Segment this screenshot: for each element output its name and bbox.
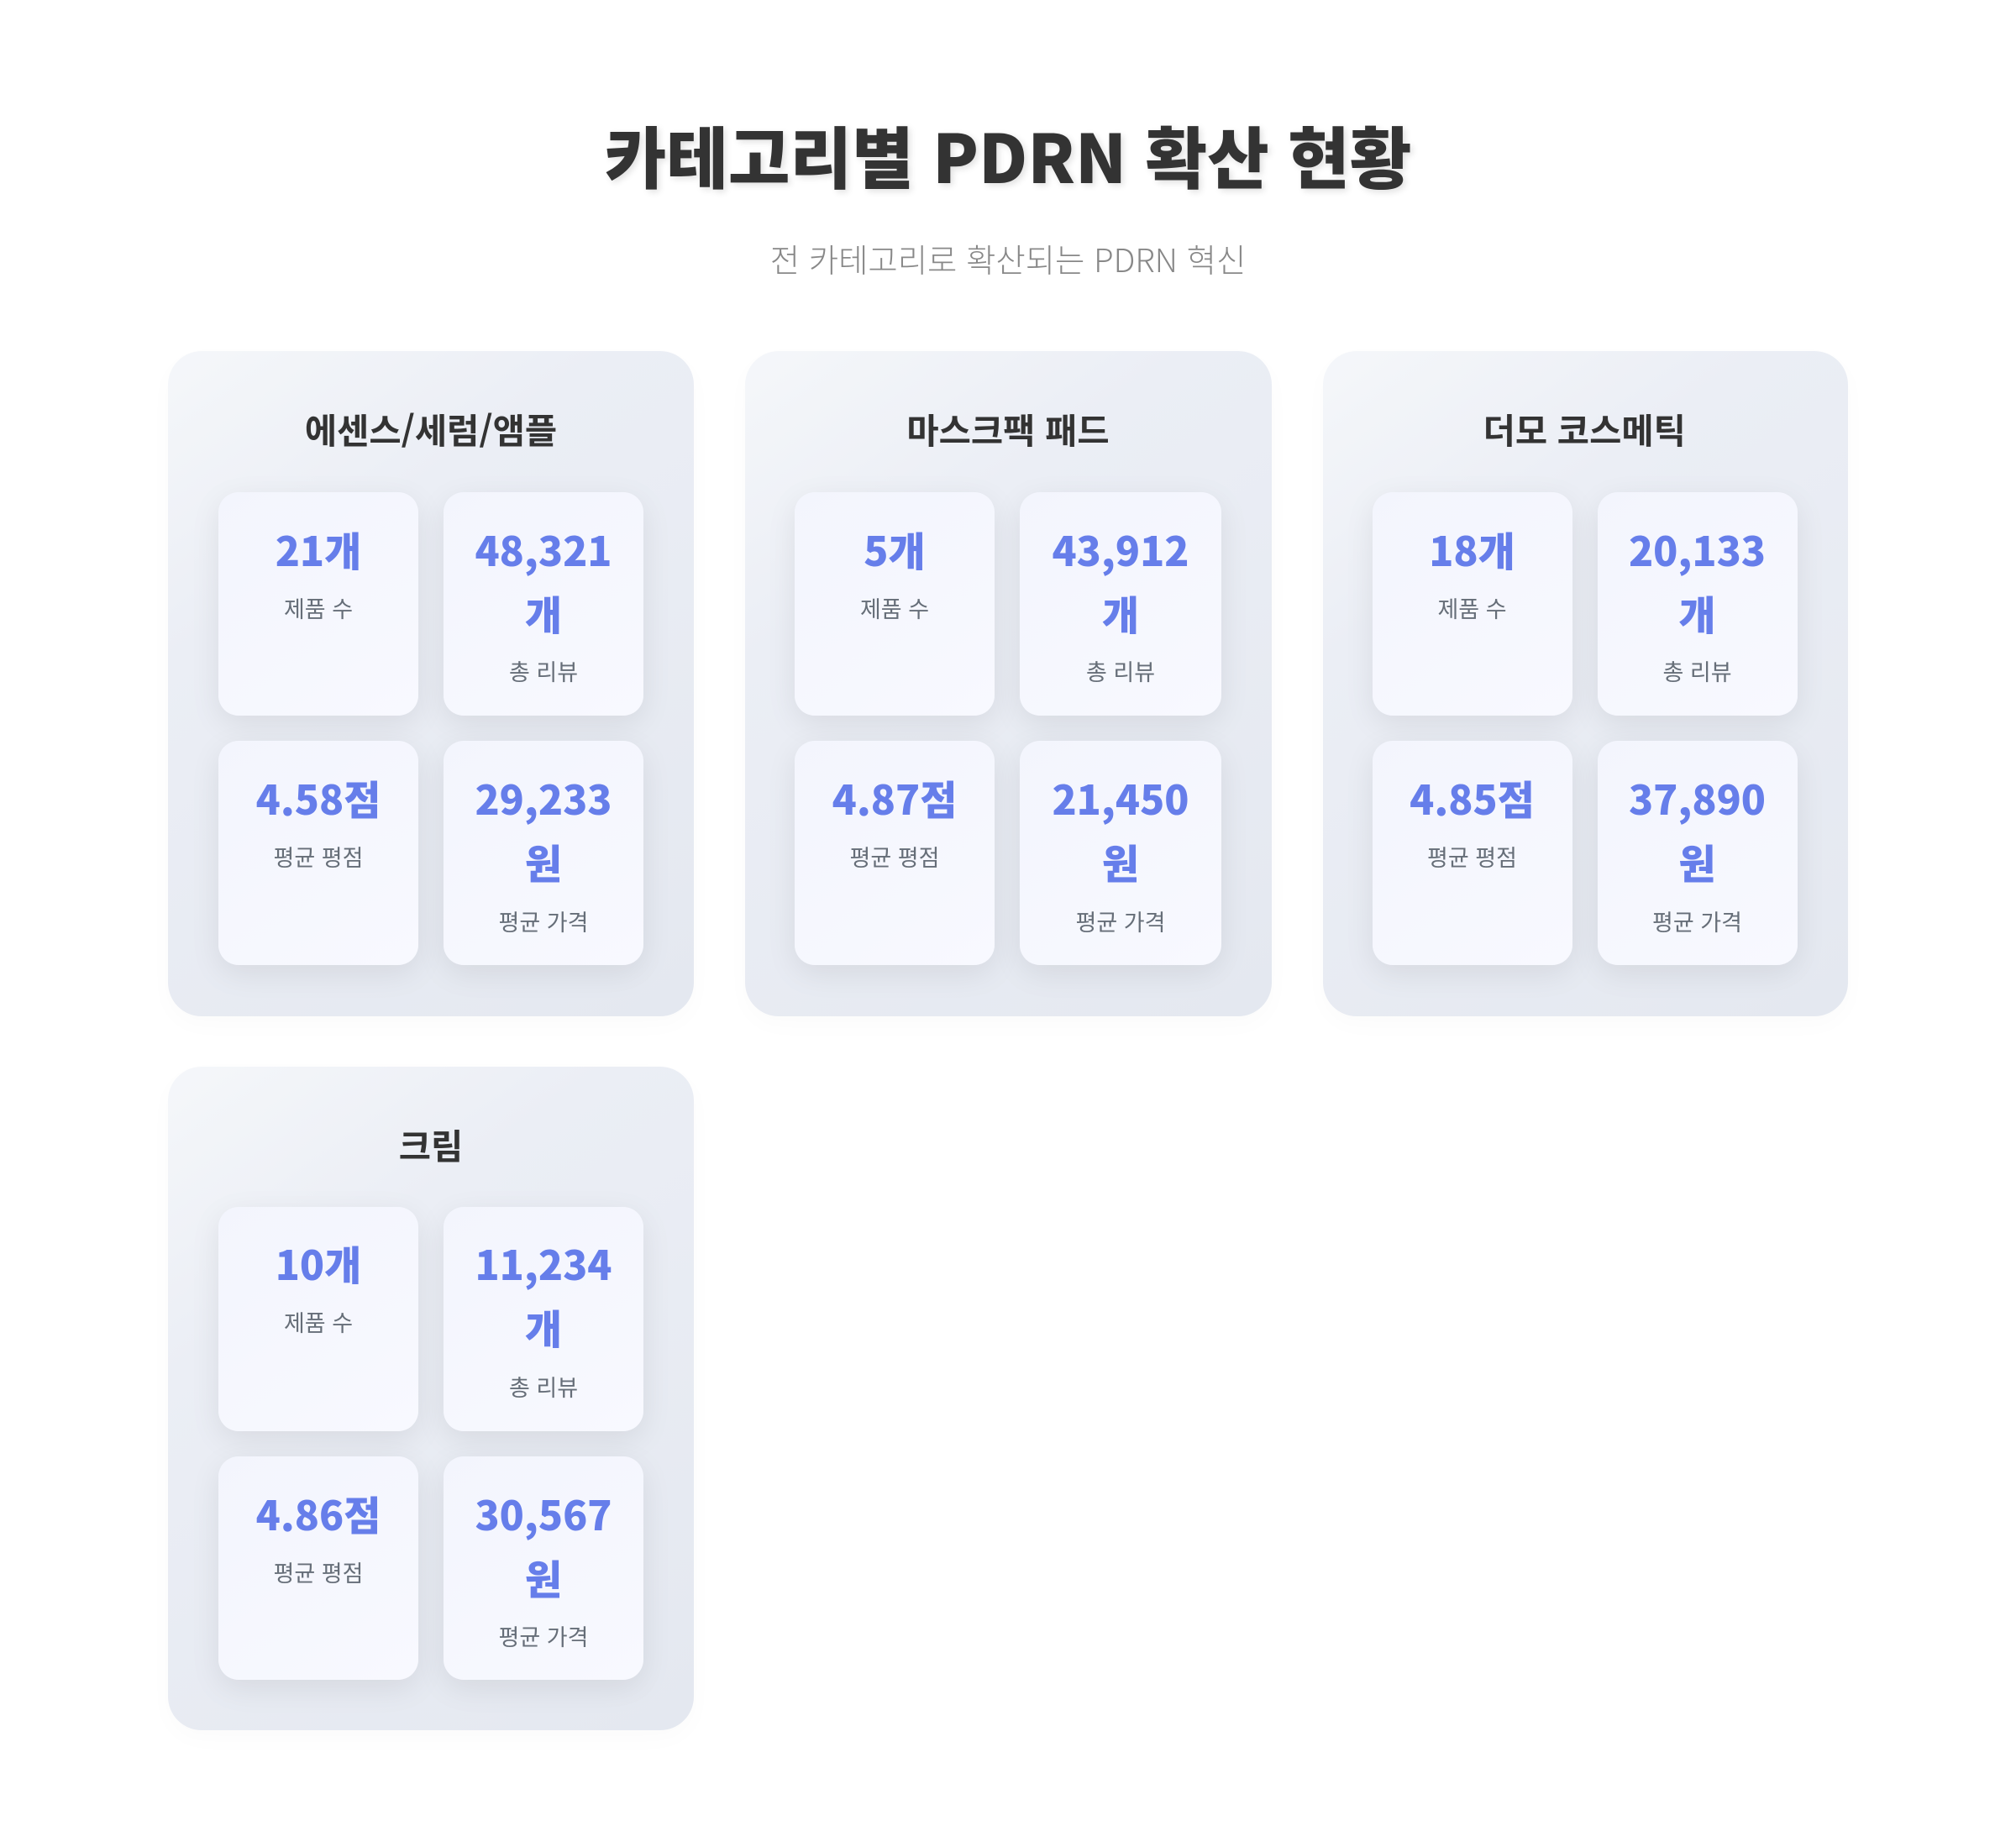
stat: total reviews — [444, 1207, 643, 1431]
stat: total reviews — [1020, 492, 1221, 716]
stat: average rating: 평균 평점 — [1427, 840, 1517, 873]
stat: average rating: 4.86점 — [256, 1483, 381, 1542]
stat: average rating: 4.87점 — [832, 768, 957, 826]
stat: total reviews: 총 리뷰 — [1086, 654, 1155, 687]
stat: average price: 21,450원 — [1052, 768, 1189, 890]
stat: total reviews: 48,321개 — [475, 519, 612, 642]
panel: 더모 코스메틱 — [1322, 351, 1848, 1016]
stat: total reviews: 20,133개 — [1629, 519, 1766, 642]
stat: total reviews: 43,912개 — [1052, 519, 1189, 642]
stat: total reviews — [1598, 492, 1798, 716]
stat: average price: 평균 가격 — [1076, 904, 1165, 937]
stat: total reviews: 총 리뷰 — [1662, 654, 1732, 687]
stat: average rating: 4.58점 — [256, 768, 381, 826]
stat: product count — [218, 492, 418, 716]
stat: total reviews: 11,234개 — [475, 1233, 612, 1356]
stat: average rating — [795, 741, 995, 965]
stat: product count: 제품 수 — [284, 591, 353, 624]
panel heading: 더모 코스메틱 — [1483, 403, 1686, 454]
stat: average price — [444, 1456, 643, 1680]
stat: average rating: 4.85점 — [1410, 768, 1535, 826]
stat: average rating: 평균 평점 — [850, 840, 939, 873]
subtitle: 전 카테고리로 확산되는 PDRN 혁신 — [770, 235, 1246, 282]
stat: average rating — [218, 741, 418, 965]
stat: average rating: 평균 평점 — [274, 840, 363, 873]
stat: average price — [444, 741, 643, 965]
stat: average rating — [1373, 741, 1572, 965]
stat: product count: 제품 수 — [860, 591, 929, 624]
panel: 마스크팩 패드 — [744, 351, 1272, 1016]
stat: product count — [795, 492, 995, 716]
stat: average price: 평균 가격 — [1652, 904, 1742, 937]
stat: product count: 제품 수 — [1437, 591, 1507, 624]
stat: average rating: 평균 평점 — [274, 1556, 363, 1588]
stat: product count — [218, 1207, 418, 1431]
stat: product count — [1373, 492, 1572, 716]
panel: 에센스/세럼/앰플 — [168, 351, 694, 1016]
stat: product count: 제품 수 — [284, 1305, 353, 1338]
panel: 크림 — [168, 1067, 694, 1730]
stat: average price: 37,890원 — [1629, 768, 1766, 890]
stat: average price: 평균 가격 — [499, 904, 588, 937]
stat: product count: 21개 — [276, 519, 361, 578]
stat: average price — [1020, 741, 1221, 965]
stat: average rating — [218, 1456, 418, 1680]
stat: product count: 5개 — [864, 519, 926, 578]
stat: product count: 10개 — [276, 1233, 361, 1292]
panel heading: 에센스/세럼/앰플 — [305, 403, 557, 454]
panel heading: 마스크팩 패드 — [906, 403, 1110, 454]
title: 카테고리별 PDRN 확산 현황 — [605, 106, 1411, 203]
stat: average price: 29,233원 — [475, 768, 612, 890]
stat: total reviews: 총 리뷰 — [509, 654, 578, 687]
panel heading: 크림 — [399, 1119, 463, 1169]
stat: average price: 30,567원 — [475, 1483, 612, 1606]
stat: average price: 평균 가격 — [499, 1619, 588, 1652]
stat: total reviews — [444, 492, 643, 716]
stat: product count: 18개 — [1429, 519, 1515, 578]
stat: average price — [1598, 741, 1798, 965]
stat: total reviews: 총 리뷰 — [509, 1370, 578, 1403]
